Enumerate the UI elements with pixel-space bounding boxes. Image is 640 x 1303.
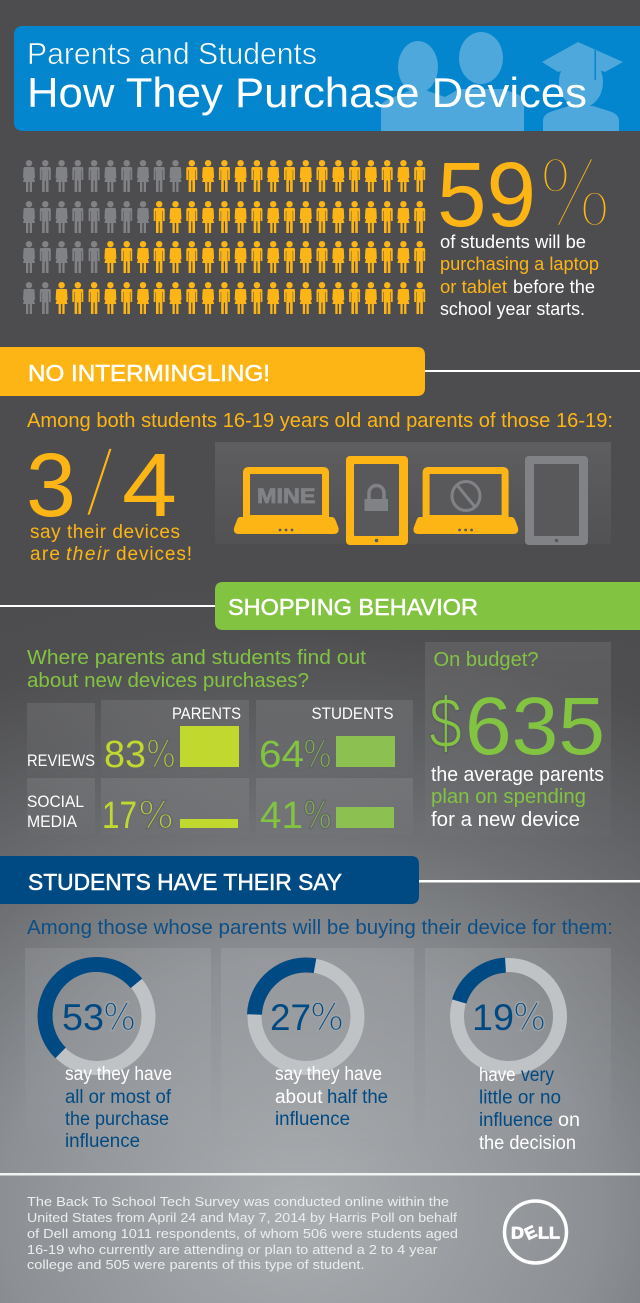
students reviews 64 percent (259, 733, 395, 776)
parents reviews 83 percent: % (146, 733, 176, 776)
section band: no intermingling (0, 347, 640, 396)
donut caption: influence (65, 1131, 140, 1152)
panel: on budget: the average parents (431, 764, 604, 786)
column and row labels: STUDENTS (312, 704, 394, 723)
survey footnote: The Back To School Tech Survey was conducted online within the (27, 1194, 449, 1209)
table panels (27, 700, 413, 835)
stat description (30, 522, 192, 565)
stat: 3 of 4: 4 (122, 436, 177, 536)
stat: 635 dollars: 635 (465, 681, 605, 772)
panel: on budget: plan on spending (431, 786, 586, 808)
donut caption: little or no (479, 1088, 561, 1108)
row 3 (23, 241, 425, 273)
donut caption: on (558, 1110, 580, 1131)
shopping question heading: Where parents and students find out (27, 647, 366, 669)
survey footnote (27, 1194, 458, 1272)
donut: 27 percent (254, 965, 388, 1130)
stat description: of students will be (440, 232, 586, 252)
donut: 53 percent: 53 (62, 997, 104, 1038)
donut caption: half the (327, 1087, 388, 1108)
donut: 19 percent: % (513, 996, 546, 1039)
parents reviews 83 percent (104, 726, 239, 776)
section band: students have their say (0, 856, 640, 904)
survey footnote: United States from April 24 and May 7, 2014 by Harris Poll on behalf (27, 1210, 457, 1225)
icon: parents and student silhouettes (381, 32, 623, 131)
title line 1: Parents and Students (27, 36, 317, 71)
parents reviews 83 percent: 83 (104, 734, 146, 776)
icon: laptop mine: MINE (257, 485, 316, 508)
column and row labels: REVIEWS (27, 751, 95, 770)
section band: students have their say: STUDENTS HAVE THEIR SAY (28, 869, 342, 895)
stat description: school year starts. (440, 299, 585, 319)
parents social 17 percent: % (138, 794, 174, 837)
stat: 59 percent: 59 (437, 144, 536, 246)
stat description: or tablet (440, 277, 507, 297)
panel: on budget (425, 642, 611, 837)
header banner (14, 26, 640, 131)
stat: 3 of 4 (26, 430, 192, 565)
students social 41 percent: % (303, 794, 332, 837)
stat description: before the (513, 277, 595, 297)
donut caption: have (479, 1065, 516, 1086)
title line 2: How They Purchase Devices (27, 69, 587, 116)
section band: no intermingling: NO INTERMINGLING! (28, 360, 270, 386)
column and row labels: PARENTS (172, 704, 241, 723)
stat: 59 percent (437, 140, 612, 319)
row 1 (23, 160, 425, 192)
parents social 17 percent (102, 794, 238, 837)
donut: 19 percent: 19 (472, 997, 514, 1038)
column and row labels: SOCIAL (27, 792, 84, 811)
students subheading: Among those whose parents will be buying their device for them: (27, 917, 613, 939)
icon: tablet gray (525, 456, 588, 545)
panel: devices (215, 442, 611, 545)
donut caption: the decision (479, 1133, 576, 1154)
donut: 53 percent: % (103, 996, 136, 1039)
icon: laptop prohibited (413, 467, 518, 534)
people pictogram (23, 160, 425, 314)
icon: Dell logo: LL (538, 1224, 560, 1242)
column and row labels: MEDIA (27, 812, 78, 831)
donut caption (275, 1064, 388, 1130)
donut caption: very (521, 1065, 554, 1086)
donut caption: say they have (275, 1064, 382, 1085)
panel: on budget: for a new device (431, 809, 580, 831)
donut: 27 percent: 27 (270, 997, 311, 1038)
students social 41 percent: 41 (260, 795, 303, 837)
icon: Dell logo (504, 1201, 566, 1263)
stat: 3 of 4: / (84, 430, 115, 530)
shopping question heading (27, 647, 366, 692)
students reviews 64 percent: 64 (259, 734, 304, 776)
icon: Dell logo: D (511, 1224, 524, 1242)
stat: 635 dollars: $ (429, 684, 462, 764)
donut caption (479, 1065, 580, 1154)
parents social 17 percent: 17 (102, 795, 137, 837)
panel: on budget: On budget? (434, 649, 538, 671)
donut caption: all or most of (65, 1087, 172, 1108)
survey footnote: of Dell among 1011 respondents, of whom 506 were students aged (27, 1226, 458, 1241)
donut: 53 percent (45, 965, 172, 1152)
students social 41 percent (260, 794, 394, 837)
stat description: their (66, 544, 110, 565)
survey footnote: 16-19 who currently are attending or plan to attend a 2 to 4 year (27, 1242, 438, 1257)
section band: shopping behavior: SHOPPING BEHAVIOR (228, 594, 478, 620)
icon: Dell logo: E (522, 1222, 540, 1244)
survey footnote: college and 505 were parents of this type of student. (27, 1257, 364, 1272)
stat description: say their devices (30, 522, 180, 543)
donut: 19 percent (457, 965, 580, 1154)
icon: tablet locked (346, 456, 408, 545)
donut caption: say they have (65, 1064, 172, 1085)
donut: 27 percent: % (310, 996, 344, 1039)
section band: shopping behavior (0, 582, 640, 630)
stat description (440, 232, 599, 319)
students reviews 64 percent: % (303, 733, 332, 776)
shopping question heading: about new devices purchases? (27, 670, 309, 692)
intermingling subheading: Among both students 16-19 years old and parents of those 16-19: (27, 410, 613, 432)
donut caption: influence (479, 1110, 553, 1131)
stat description: devices! (116, 544, 192, 565)
donut caption: influence (275, 1109, 350, 1130)
row 2 (23, 201, 425, 233)
influence panels (25, 948, 611, 1138)
donut caption: about (275, 1087, 323, 1108)
icon: laptop mine (234, 467, 339, 534)
row 4 (23, 282, 425, 314)
stat description: are (30, 544, 60, 565)
column and row labels (27, 704, 394, 831)
stat: 59 percent: % (538, 140, 612, 249)
donut caption (65, 1064, 172, 1152)
stat: 3 of 4: 3 (26, 436, 76, 536)
donut caption: the purchase (65, 1109, 169, 1130)
stat description: purchasing a laptop (440, 254, 599, 274)
